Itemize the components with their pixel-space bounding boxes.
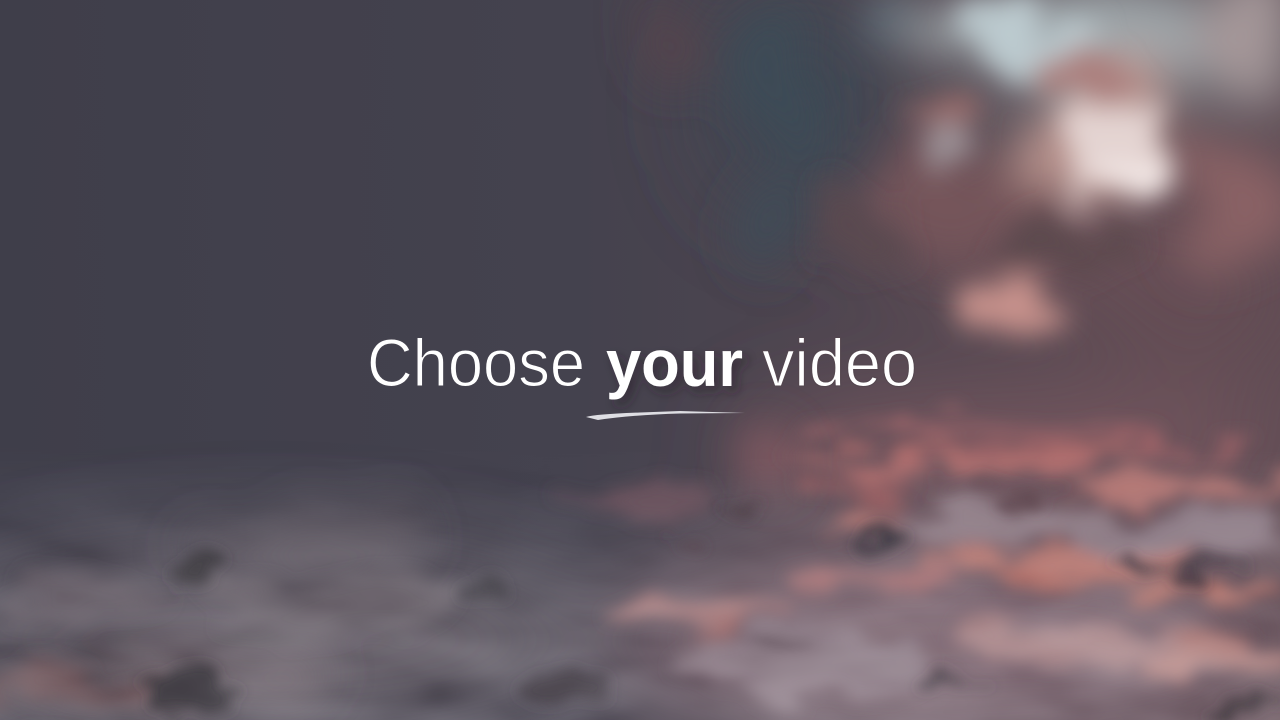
- title: Choose your video: Choose: [367, 326, 585, 401]
- clouds: lower pink bands: [0, 418, 1280, 710]
- title: Choose your video: your: [606, 326, 743, 400]
- clouds: dark crevices: [145, 487, 1280, 713]
- clouds: soft mottled texture: [0, 493, 1280, 720]
- title: Choose your video: [367, 326, 917, 401]
- title: Choose your video: video: [762, 326, 917, 401]
- underline stroke: [586, 411, 745, 420]
